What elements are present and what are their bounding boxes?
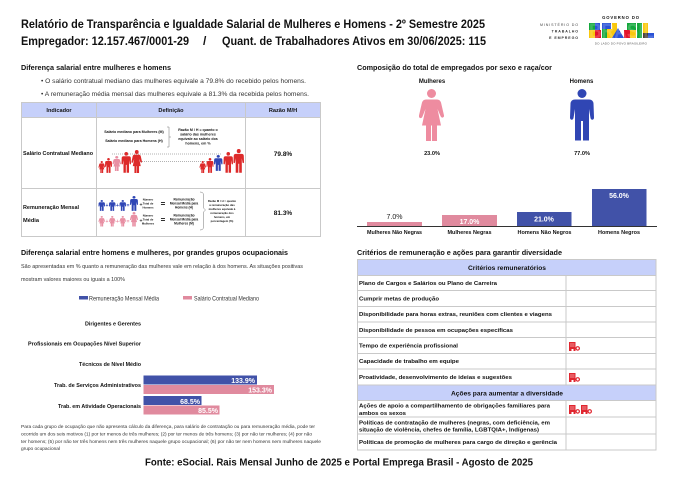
bar chart: composição por raça/cor: Mulheres Negras (448, 230, 492, 236)
text block: explicação (21, 264, 303, 283)
title: Relatório de Transparência e Igualdade Salarial de Mulheres e Homens - 2º Semestre 2025 (21, 17, 485, 31)
bar chart: grupos ocupacionais (28, 322, 274, 415)
logo: ministério e governo do Brasil: TRABALHO (552, 30, 579, 34)
diagram: remuneração média: homens, em (214, 215, 231, 219)
text block: nota de rodapé: Para cada grupo de ocupação que não apresenta cálculo da diferença, para salário de contratação ou para remuneração média, pode ter (21, 424, 315, 430)
row: salário contratual mediano (23, 151, 292, 158)
critérios list: Disponibilidade de pessoa em ocupações específicas (359, 328, 513, 334)
row: remuneração mensal média: Remuneração Mensal (23, 205, 79, 211)
bar chart: grupos ocupacionais: Profissionais em Ocupações Nível Superior (28, 342, 142, 348)
critérios list: Plano de Cargos e Salários ou Plano de Carreira (359, 281, 498, 287)
critérios list: Capacidade de trabalho em equipe (359, 359, 459, 365)
title: Quant. de Trabalhadores Ativos em 30/06/2025: 115 (222, 34, 486, 48)
table header: Indicador (46, 108, 72, 114)
title (21, 17, 486, 48)
heading: diferença por grupos ocupacionais: Diferença salarial entre homens e mulheres, por grandes grupos ocupacionais (21, 248, 288, 257)
bar chart: grupos ocupacionais: 133.9% (231, 378, 256, 385)
heading: diferença salarial: Diferença salarial entre mulheres e homens (21, 65, 171, 72)
diagram: remuneração média: mulheres equivale à (209, 207, 236, 211)
bar chart: grupos ocupacionais: Trab. em Atividade Operacionais (58, 404, 141, 410)
title: / (203, 34, 207, 48)
diagram: remuneração média: ÷ (140, 218, 143, 224)
icon: empresa marcou tempo de experiência (569, 342, 579, 351)
diagram: remuneração média: Total de (143, 218, 154, 222)
bar chart: grupos ocupacionais: Trab. de Serviços Administrativos (54, 383, 141, 389)
header: critérios remuneratórios: Critérios remuneratórios (468, 266, 547, 272)
icon: mulheres 23,0% (419, 79, 446, 157)
title: Empregador: 12.157.467/0001-29 (21, 34, 189, 48)
diagram: salário mediano: salário das mulheres (180, 132, 216, 136)
diagram: remuneração média: Mulheres (142, 222, 155, 226)
text block: nota de rodapé: ter homens; (5) por não ter três homens nem três mulheres naquele grupo ocupacional; (6) por não ter nem homens nem mulheres naquele (21, 439, 321, 445)
text block: resumo: • A remuneração média mensal das mulheres equivale a 81.3% da recebida pelos homens. (41, 92, 309, 98)
diagram: remuneração média: Número (143, 214, 154, 218)
logo: ministério e governo do Brasil: BRASIL (589, 20, 654, 43)
ações list: Políticas de contratação de mulheres (negras, com deficiência, em (359, 420, 550, 426)
diagram: remuneração média: porcentagem (%) (211, 219, 233, 223)
ações list: situação de violência, chefes de família, LGBTQIA+, Indígenas) (359, 428, 539, 434)
text block: nota de rodapé (21, 424, 321, 452)
panel: tabela de critérios (358, 259, 656, 450)
logo: ministério e governo do Brasil: GOVERNO DO (602, 15, 640, 20)
bar chart: grupos ocupacionais: 68.5% (180, 399, 201, 406)
fonte: Fonte: eSocial. Rais Mensal Junho de 2025 e Portal Emprega Brasil - Agosto de 2025 (145, 456, 533, 468)
critérios list: Disponibilidade para horas extras, reuniões com clientes e viagens (359, 312, 552, 318)
diagram: remuneração média: = (161, 200, 166, 208)
diagram: salário mediano: Salário mediano para Homens (H) (105, 139, 164, 143)
diagram: salário mediano: Salário mediano para Mulheres (M) (104, 130, 165, 134)
icon: homens 77,0% (570, 79, 594, 157)
ações list: Políticas de promoção de mulheres para cargo de direção e gerência (359, 440, 558, 446)
icon: mulheres 23,0%: 23.0% (424, 151, 440, 157)
logo: ministério e governo do Brasil (540, 15, 654, 46)
text block: resumo (41, 79, 309, 98)
diagram: remuneração média: Homens (142, 206, 154, 210)
bar chart: grupos ocupacionais: Dirigentes e Gerentes (85, 322, 141, 328)
text block: nota de rodapé: ocorrido um dos seis motivos (1) por ter menos de três mulheres; (2) por ter menos de três homens; (3) por não ter mulheres; (4) por não (21, 432, 312, 438)
diagram: remuneração média: = (127, 203, 130, 209)
icon: empresa marcou ações de apoio (569, 405, 591, 414)
row: remuneração mensal média: 81.3% (274, 210, 292, 217)
critérios list: Cumprir metas de produção (359, 296, 440, 302)
ações list: Ações de apoio a compartilhamento de obrigações familiares para (359, 404, 551, 410)
diagram: remuneração média: Número (143, 198, 154, 202)
icon: homens 77,0%: Homens (570, 79, 594, 85)
text block: explicação: São apresentadas em % quanto a remuneração das mulheres vale em relação à dos homens. As situações positivas (21, 264, 303, 270)
bar chart: composição por raça/cor: Homens Não Negros (518, 230, 572, 236)
diagram: remuneração média: Remuneração (173, 214, 195, 218)
logo: ministério e governo do Brasil: E EMPREGO (549, 36, 579, 40)
heading: critérios: Critérios de remuneração e ações para garantir diversidade (357, 248, 562, 257)
diagram: remuneração média: = (127, 219, 130, 225)
diagram: remuneração média: Mulheres (M) (174, 222, 194, 226)
diagram: remuneração média: Mensal Média para (170, 218, 198, 222)
text block: nota de rodapé: grupo ocupacional (21, 446, 60, 452)
legend: Remuneração Mensal Média (89, 296, 160, 302)
legend (79, 296, 260, 302)
row: salário contratual mediano: Salário Contratual Mediano (23, 151, 94, 157)
row: remuneração mensal média (23, 205, 292, 224)
diagram: remuneração média: remuneração dos (210, 211, 234, 215)
diagram: remuneração média: = (161, 216, 166, 224)
diagram: remuneração média: + (116, 203, 119, 209)
diagram: remuneração média: Remuneração (173, 198, 195, 202)
table header: Definição (158, 108, 184, 114)
bar chart: composição por raça/cor: 17.0% (460, 219, 480, 226)
logo: ministério e governo do Brasil: MINISTÉRIO DO (540, 22, 579, 27)
bar chart: composição por raça/cor: 7.0% (387, 214, 402, 221)
header: ações para aumentar a diversidade: Ações para aumentar a diversidade (451, 392, 564, 398)
row: remuneração mensal média: Média (23, 218, 40, 224)
diagram: remuneração média: Mensal Média para (170, 202, 198, 206)
text block: resumo: • O salário contratual mediano das mulheres equivale a 79.8% do recebido pelos homens. (41, 79, 306, 85)
bar chart: composição por raça/cor: Homens Negros (598, 230, 640, 236)
diagram: salário mediano: Razão M / H = quanto o (178, 128, 219, 132)
icon: homens 77,0%: 77.0% (574, 151, 590, 157)
icon: mulheres 23,0%: Mulheres (419, 79, 446, 85)
text block: explicação: mostram valores maiores ou iguais a 100% (21, 277, 125, 283)
bar chart: grupos ocupacionais: Técnicos de Nível Médio (79, 362, 142, 368)
bar chart: grupos ocupacionais: 85.5% (198, 408, 219, 415)
diagram: salário mediano: homens, em % (185, 142, 211, 146)
legend: Salário Contratual Mediano (194, 296, 260, 302)
diagram: salário mediano (98, 127, 244, 173)
diagram: salário mediano: equivale ao salário dos (178, 137, 218, 141)
diagram: remuneração média: + (106, 219, 109, 225)
critérios list (359, 281, 552, 381)
diagram: remuneração média: a remuneração das (209, 203, 235, 207)
bar chart: composição por raça/cor: 56.0% (609, 193, 630, 200)
table header (21, 102, 320, 118)
critérios list: Tempo de experiência profissional (359, 344, 458, 350)
icon: empresa marcou proatividade (569, 373, 579, 382)
bar chart: grupos ocupacionais: 153.3% (248, 388, 273, 394)
bar chart: composição por raça/cor: Mulheres Não Negras (367, 230, 422, 236)
heading: composição: Composição do total de empregados por sexo e raça/cor (357, 63, 552, 72)
diagram: remuneração média: Total de (143, 202, 154, 206)
ações list (359, 404, 558, 446)
diagram: remuneração média: + (116, 219, 119, 225)
diagram: remuneração média: + (106, 203, 109, 209)
critérios list: Proatividade, desenvolvimento de ideias e sugestões (359, 375, 512, 381)
ações list: ambos os sexos (359, 411, 406, 417)
panel: tabela de indicadores (21, 102, 320, 236)
diagram: remuneração média: Homens (H) (175, 206, 193, 210)
bar chart: composição por raça/cor (357, 189, 657, 236)
bar chart: composição por raça/cor: 21.0% (534, 216, 555, 224)
row: salário contratual mediano: 79.8% (274, 151, 292, 158)
table header: Razão M/H (269, 108, 297, 114)
diagram: remuneração média: ÷ (140, 202, 143, 208)
diagram: remuneração média: Razão M / H = quanto (208, 199, 236, 203)
diagram: remuneração média (98, 192, 236, 230)
logo: ministério e governo do Brasil: DO LADO DO POVO BRASILEIRO (595, 42, 648, 46)
